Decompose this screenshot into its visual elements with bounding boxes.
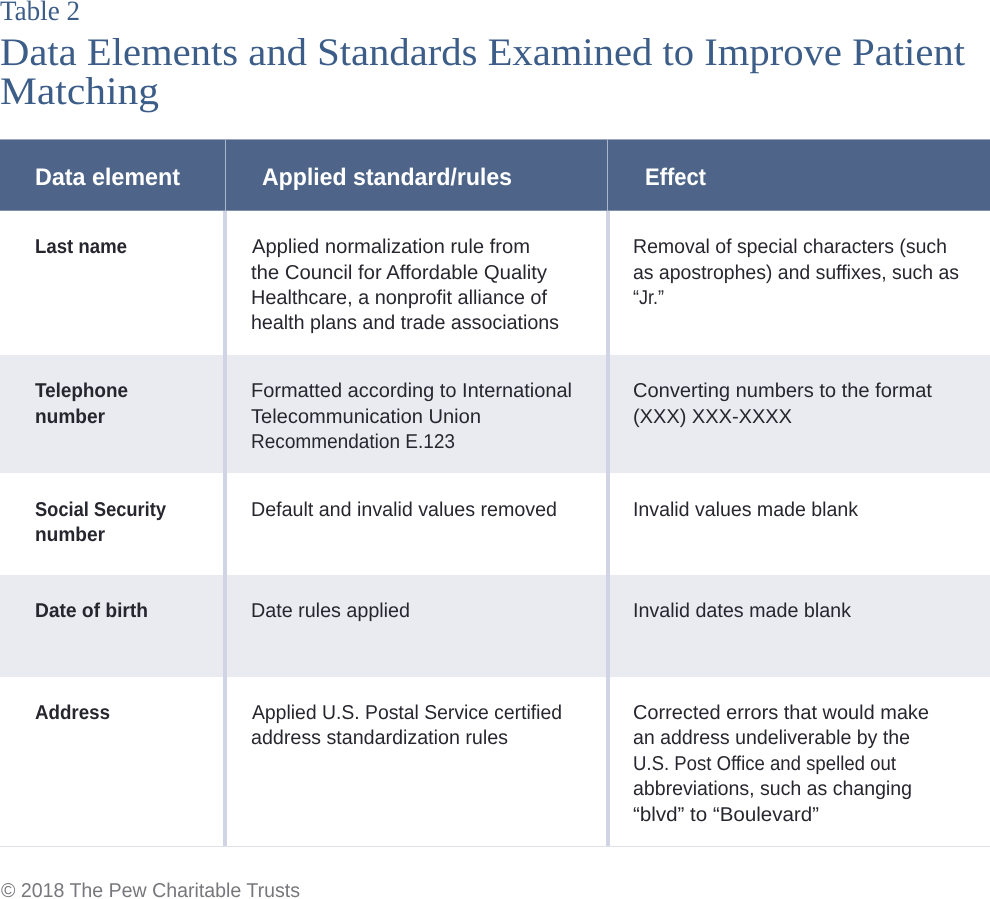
row: address: Corrected errors that would make (633, 702, 929, 724)
row: address: an address undeliverable by the (633, 727, 910, 749)
row: last name: Applied normalization rule from (252, 236, 530, 258)
row: address: abbreviations, such as changing (633, 778, 912, 800)
table header (0, 139, 990, 211)
row: address: Address (35, 702, 110, 724)
table header: Applied standard/rules (262, 164, 512, 191)
row: telephone number: (XXX) XXX-XXXX (633, 406, 792, 428)
row: telephone number: Telephone (35, 380, 128, 402)
row: address: address standardization rules (251, 727, 508, 749)
row: date of birth (35, 600, 852, 622)
row: social security number (35, 499, 859, 546)
row: telephone number (35, 380, 932, 453)
row: social security number: Default and invalid values removed (251, 499, 557, 521)
row: address: U.S. Post Office and spelled out (633, 753, 896, 775)
title (0, 31, 965, 113)
row: social security number: number (35, 524, 105, 546)
row: telephone number: Recommendation E.123 (251, 431, 455, 453)
table bottom rule (0, 846, 990, 847)
row: last name: Removal of special characters (such (633, 236, 947, 258)
row: address: “blvd” to “Boulevard” (633, 804, 819, 826)
title: Data Elements and Standards Examined to Improve Patient (0, 31, 965, 74)
row: address: Applied U.S. Postal Service certified (252, 702, 562, 724)
row: last name: the Council for Affordable Quality (251, 262, 547, 284)
table header: Effect (645, 164, 706, 191)
column divider 2 (606, 210, 610, 846)
row: date of birth: Invalid dates made blank (633, 600, 852, 622)
row shading: date of birth (0, 575, 990, 677)
column divider 1 (223, 210, 227, 846)
row: last name: health plans and trade associations (251, 312, 559, 334)
row shading: telephone number (0, 355, 990, 473)
row: address (35, 702, 929, 826)
row: social security number: Invalid values made blank (633, 499, 859, 521)
row: date of birth: Date of birth (35, 600, 148, 622)
row: telephone number: Telecommunication Union (251, 406, 481, 428)
row: last name: “Jr.” (633, 287, 664, 309)
table header: Data element (35, 164, 180, 191)
row: telephone number: Formatted according to International (251, 380, 572, 402)
row: last name (35, 236, 959, 334)
row: telephone number: Converting numbers to the format (633, 380, 932, 402)
row: last name: Healthcare, a nonprofit alliance of (251, 287, 547, 309)
row: last name: Last name (35, 236, 127, 258)
row: date of birth: Date rules applied (251, 600, 410, 622)
row: last name: as apostrophes) and suffixes, such as (633, 262, 959, 284)
title: Matching (0, 70, 159, 113)
row: social security number: Social Security (35, 499, 167, 521)
row: telephone number: number (35, 406, 105, 428)
